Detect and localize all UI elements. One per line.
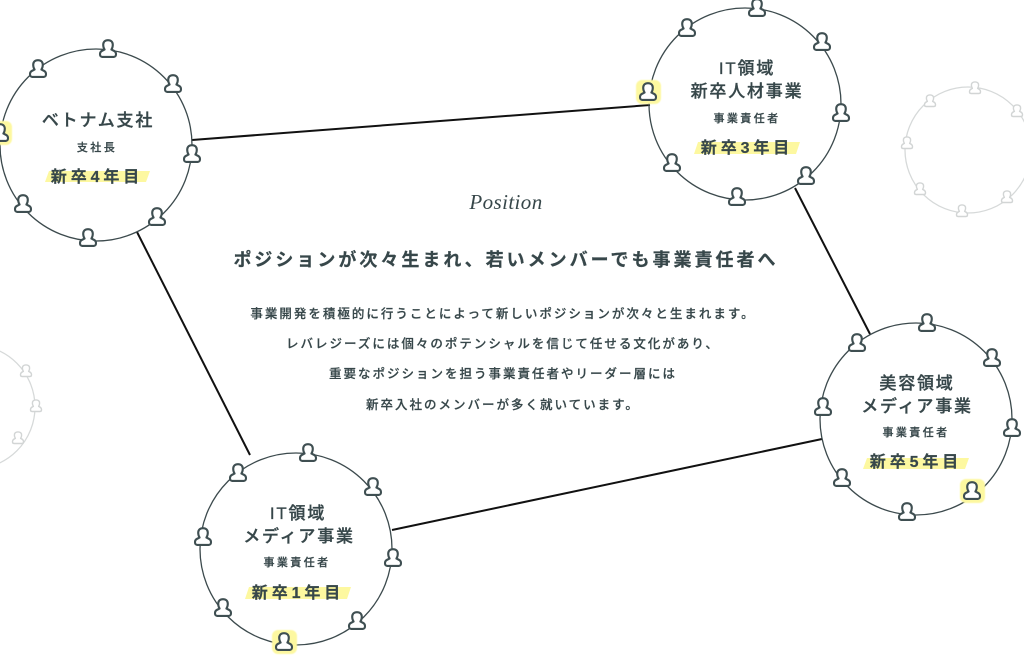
main heading: ポジションが次々生まれ、若いメンバーでも事業責任者へ <box>233 249 779 270</box>
script label: Position: Position <box>468 190 543 214</box>
heading: 美容領域 メディア事業 <box>861 374 973 416</box>
heading: IT領域 新卒人材事業 <box>691 59 803 101</box>
highlight band <box>245 587 351 599</box>
highlight band <box>694 142 800 154</box>
heading: 美容領域 メディア事業: 美容領域 <box>879 374 955 393</box>
panel: 美容領域 メディア事業 <box>815 314 1020 520</box>
connector lines <box>137 105 870 530</box>
panel: IT領域 新卒人材事業 <box>636 0 849 205</box>
body text <box>250 306 756 412</box>
heading: IT領域 新卒人材事業: IT領域 <box>719 59 775 78</box>
highlighted person icon <box>636 80 661 104</box>
role label: 支社長 <box>77 140 117 154</box>
person icons <box>195 444 401 629</box>
person icons <box>664 0 849 205</box>
heading: ベトナム支社: ベトナム支社 <box>42 111 154 130</box>
body text: 新卒入社のメンバーが多く就いています。 <box>366 397 640 412</box>
tenure label: 新卒3年目 <box>701 138 793 157</box>
tenure label: 新卒4年目 <box>51 167 143 186</box>
role label: 事業責任者 <box>714 111 780 125</box>
highlight band <box>45 171 150 182</box>
decorative gray circle: left <box>0 345 42 469</box>
heading: IT領域 メディア事業: メディア事業 <box>243 526 355 546</box>
highlighted person icon <box>0 121 12 145</box>
role label: 事業責任者 <box>264 555 330 569</box>
highlight band <box>863 458 969 469</box>
person icons <box>815 314 1020 520</box>
body text: レバレジーズには個々のポテンシャルを信じて任せる文化があり、 <box>286 336 720 351</box>
person icons <box>15 40 200 246</box>
tenure label: 新卒5年目 <box>870 452 962 471</box>
panel: ベトナム支社 <box>0 40 200 246</box>
heading: IT領域 メディア事業: IT領域 <box>270 504 326 523</box>
panel: IT領域 メディア事業 <box>195 444 401 654</box>
decorative gray circle: right <box>902 82 1024 217</box>
heading: IT領域 新卒人材事業: 新卒人材事業 <box>691 82 803 101</box>
highlighted person icon <box>272 630 297 654</box>
tenure label: 新卒1年目 <box>252 583 344 602</box>
highlighted person icon <box>960 479 985 503</box>
body text: 事業開発を積極的に行うことによって新しいポジションが次々と生まれます。 <box>250 306 756 321</box>
body text: 重要なポジションを担う事業責任者やリーダー層には <box>329 366 677 381</box>
heading: 美容領域 メディア事業: メディア事業 <box>861 396 973 416</box>
role label: 事業責任者 <box>882 425 950 439</box>
heading: IT領域 メディア事業 <box>243 504 355 546</box>
